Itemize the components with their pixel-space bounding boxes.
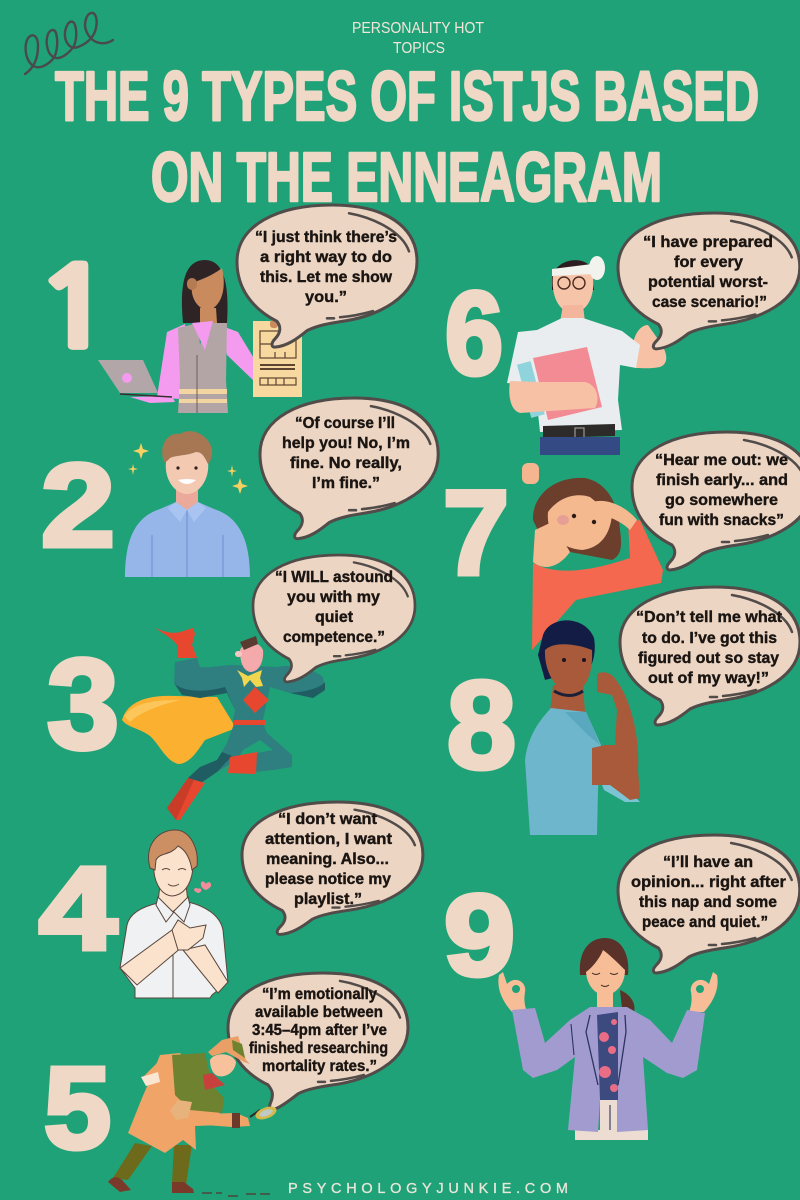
header label (352, 20, 484, 57)
speech bubble 1: a right way to do (260, 249, 392, 266)
speech bubble 8: to do. I’ve got this (642, 630, 777, 647)
panel: type 4 (39, 802, 423, 998)
panel: type 2 (41, 398, 438, 577)
speech bubble 9: opinion... right after (631, 874, 786, 891)
speech bubble 2: I’m fine.” (312, 475, 380, 492)
illustration: woman shading eyes (522, 463, 663, 650)
panel: type 8 (447, 587, 800, 835)
speech bubble 6: for every (674, 254, 743, 271)
speech bubble 5: finished researching (249, 1040, 388, 1057)
speech bubble 2 (260, 398, 438, 539)
speech bubble 7 (632, 432, 800, 570)
speech bubble 6: potential worst- (648, 274, 768, 291)
panel: type 7 (443, 432, 800, 650)
panel: type 5 (44, 973, 408, 1196)
speech bubble 5: mortality rates.” (262, 1058, 377, 1075)
decorative squiggle icon (25, 13, 113, 74)
header label: PERSONALITY HOT (352, 20, 484, 37)
speech bubble 8: out of my way!” (648, 670, 769, 687)
footer website: PSYCHOLOGYJUNKIE.COM (288, 1181, 568, 1197)
number 1: 1 (34, 254, 116, 364)
panel: type 9 (444, 835, 800, 1140)
speech bubble 3: competence.” (283, 629, 385, 646)
illustration: flying superhero with cape (122, 628, 325, 820)
speech bubble 8: figured out so stay (638, 650, 779, 667)
speech bubble 2: fine. No really, (290, 455, 402, 472)
speech bubble 8 (620, 587, 800, 725)
speech bubble 2: help you! No, I’m (282, 435, 410, 452)
speech bubble 1: this. Let me show (260, 269, 393, 286)
speech bubble 3: “I WILL astound (275, 569, 393, 586)
speech bubble 4: playlist.” (294, 891, 362, 908)
illustration: meditating woman (498, 938, 718, 1140)
illustration: woman with laptop and document (98, 260, 302, 413)
speech bubble 8: “Don’t tell me what (636, 609, 782, 626)
speech bubble 5: 3:45–4pm after I’ve (252, 1022, 387, 1039)
number 9: 9 (444, 872, 515, 1000)
title (55, 57, 759, 216)
speech bubble 1 (237, 205, 417, 347)
illustration: detective with magnifying glass (108, 1036, 278, 1196)
speech bubble 6: “I have prepared (643, 234, 773, 251)
speech bubble 7: finish early... and (656, 472, 788, 489)
speech bubble 7: “Hear me out: we (655, 452, 788, 469)
speech bubble 6 (618, 213, 800, 349)
speech bubble 6: case scenario!” (652, 294, 767, 311)
speech bubble 9: peace and quiet.” (642, 914, 768, 931)
panel: type 6 (445, 213, 800, 455)
speech bubble 7: go somewhere (665, 492, 778, 509)
panel: type 3 (47, 555, 415, 820)
number 3: 3 (47, 633, 119, 776)
speech bubble 4: “I don’t want (278, 811, 377, 828)
speech bubble 7: fun with snacks” (659, 512, 784, 529)
speech bubble 4 (242, 802, 423, 934)
number 6: 6 (445, 268, 503, 400)
speech bubble 9: “I’ll have an (663, 854, 753, 871)
speech bubble 5: “I’m emotionally (262, 986, 377, 1003)
number 4: 4 (39, 843, 117, 975)
speech bubble 9: this nap and some (639, 894, 777, 911)
speech bubble 2: “Of course I’ll (295, 415, 395, 432)
number 7: 7 (443, 466, 509, 600)
illustration: worried man with headband and book (507, 256, 666, 455)
speech bubble 3: quiet (315, 609, 353, 626)
number 5: 5 (44, 1043, 111, 1173)
illustration: man with hands on heart (120, 830, 228, 998)
speech bubble 4: attention, I want (265, 831, 392, 848)
speech bubble 1: you.” (305, 289, 347, 306)
number 8: 8 (447, 657, 516, 795)
speech bubble 4: meaning. Also... (266, 851, 389, 868)
speech bubble 5: available between (255, 1004, 383, 1021)
speech bubble 3: you with my (287, 589, 380, 606)
illustration: man flexing arm (525, 620, 640, 835)
speech bubble 3 (253, 555, 415, 682)
speech bubble 5 (228, 973, 408, 1110)
panel: type 1 (34, 205, 417, 413)
speech bubble 9 (618, 835, 800, 973)
header label: TOPICS (393, 40, 445, 57)
speech bubble 1: “I just think there’s (255, 229, 397, 246)
speech bubble 4: please notice my (265, 871, 391, 888)
number 2: 2 (41, 440, 115, 572)
illustration: smiling man with sparkles (125, 431, 250, 577)
